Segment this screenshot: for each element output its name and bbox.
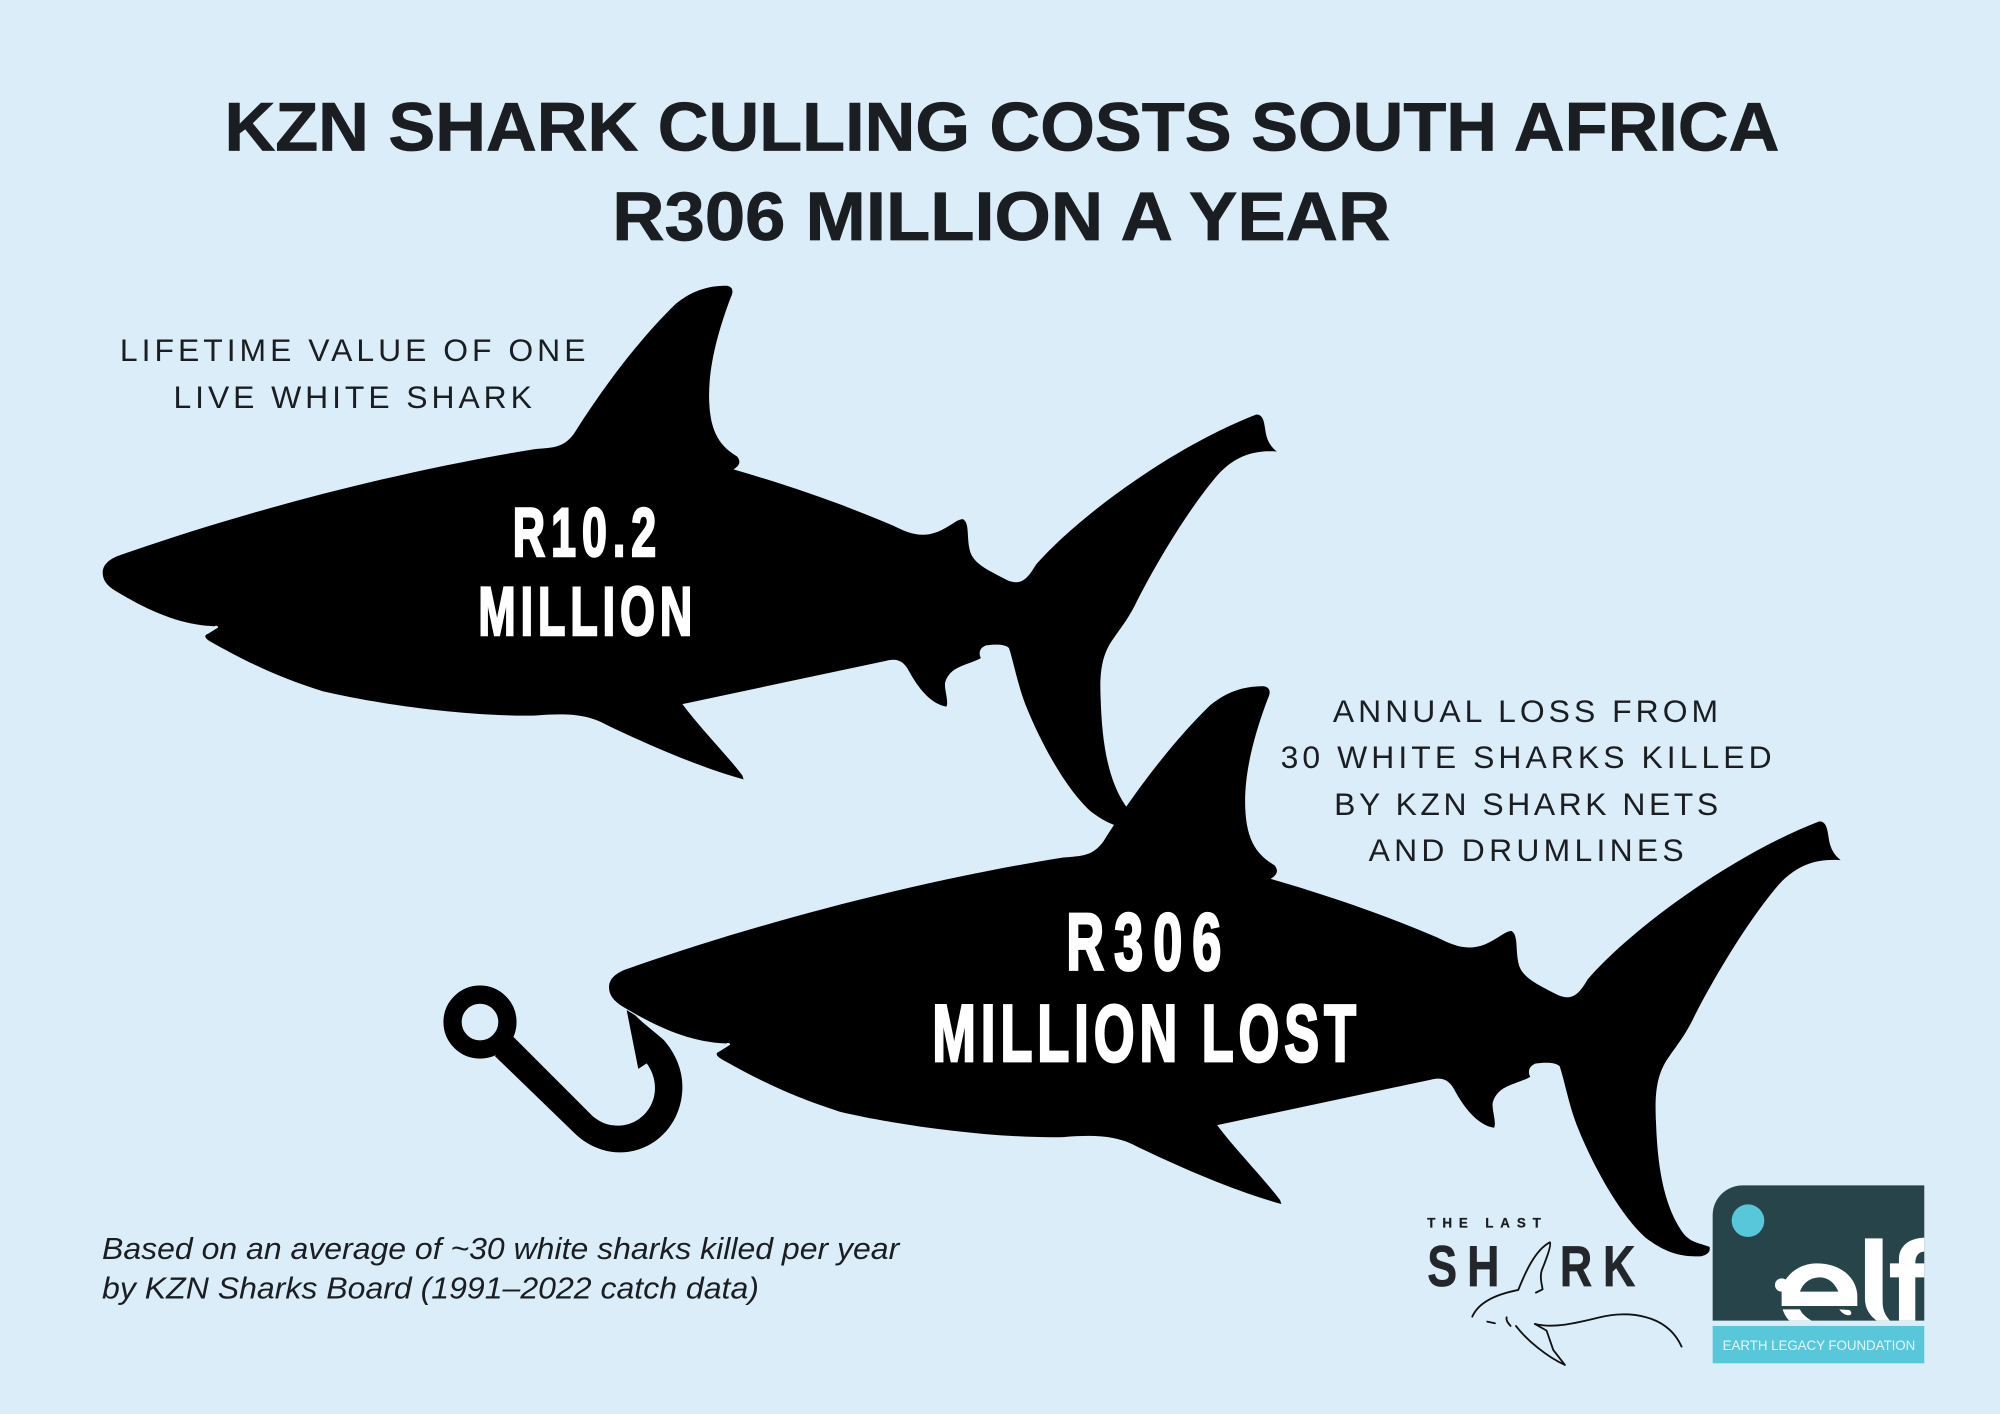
figure: R306 million lost [932, 898, 1356, 1079]
label: annual loss from 30 white sharks [1281, 693, 1772, 868]
icon: fish hook [453, 995, 682, 1152]
logo: The Last Shark: THE LAST [1427, 1216, 1542, 1231]
logo: Earth Legacy Foundation [1713, 1185, 1924, 1363]
label: lifetime value of one live white shark: LIFETIME VALUE OF ONE [120, 332, 585, 368]
figure: R10.2 million [478, 494, 692, 651]
footnote [102, 1232, 901, 1305]
title [225, 89, 1779, 255]
title: KZN SHARK CULLING COSTS SOUTH AFRICA [225, 89, 1779, 166]
label: annual loss from 30 white sharks: AND DRUMLINES [1369, 832, 1684, 868]
logo: The Last Shark [1427, 1216, 1682, 1365]
label: annual loss from 30 white sharks: ANNUAL LOSS FROM [1333, 693, 1718, 729]
figure: R10.2 million: MILLION [478, 574, 692, 651]
label: annual loss from 30 white sharks: 30 WHITE SHARKS KILLED [1281, 739, 1772, 775]
shark silhouette: one live white shark [103, 286, 1277, 829]
footnote: by KZN Sharks Board (1991–2022 catch data) [102, 1271, 759, 1305]
logo: The Last Shark: RK [1560, 1234, 1635, 1298]
figure: R306 million lost: MILLION LOST [932, 990, 1356, 1079]
logo: The Last Shark: SH [1427, 1234, 1499, 1298]
label: lifetime value of one live white shark [120, 332, 585, 415]
footnote: Based on an average of ~30 white sharks killed per year [102, 1232, 901, 1266]
title: R306 MILLION A YEAR [612, 178, 1390, 255]
label: annual loss from 30 white sharks: BY KZN SHARK NETS [1334, 786, 1718, 822]
label: lifetime value of one live white shark: LIVE WHITE SHARK [173, 379, 532, 415]
figure: R10.2 million: R10.2 [513, 494, 656, 572]
figure: R306 million lost: R306 [1066, 898, 1221, 987]
shark silhouette: 30 sharks killed [609, 686, 1841, 1256]
logo: Earth Legacy Foundation: EARTH LEGACY FOUNDATION [1723, 1338, 1915, 1353]
